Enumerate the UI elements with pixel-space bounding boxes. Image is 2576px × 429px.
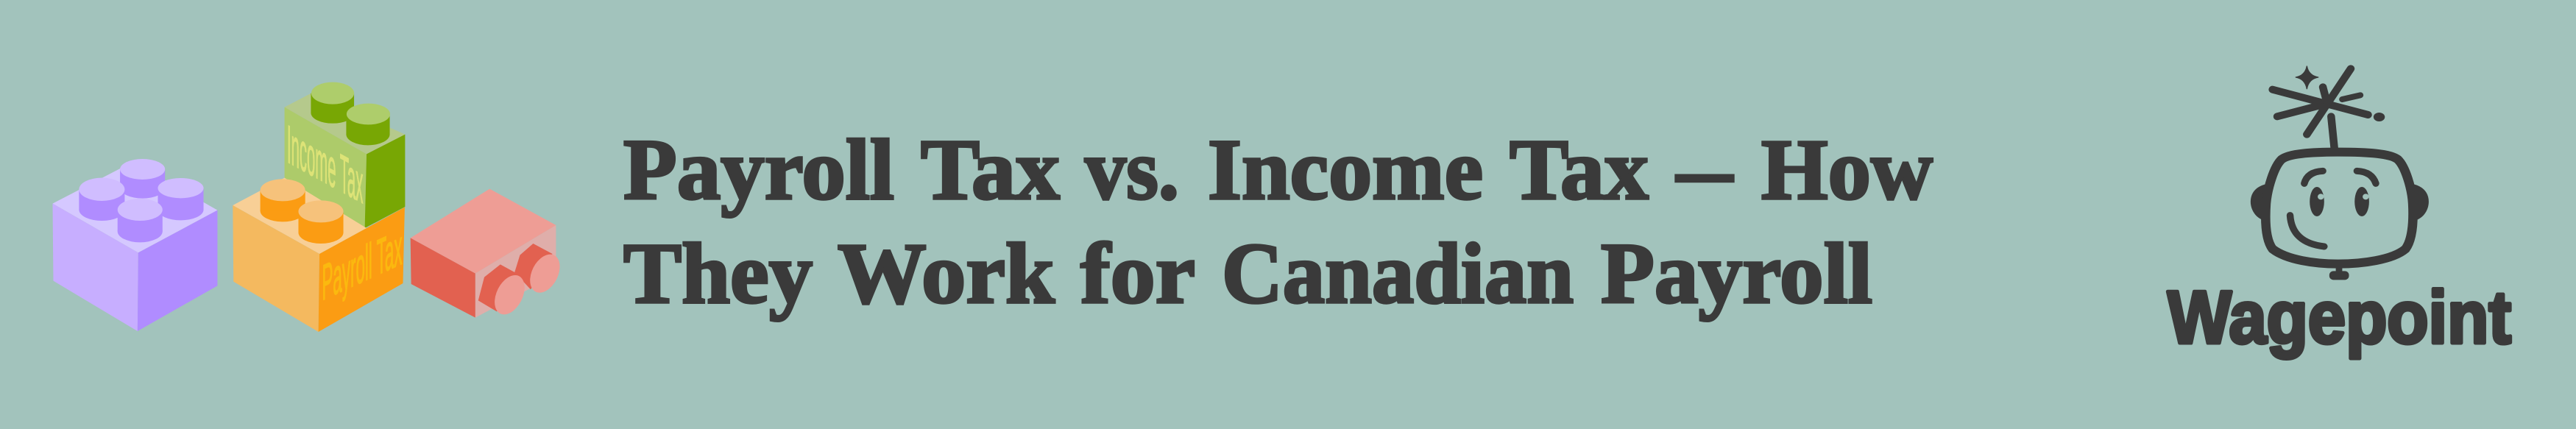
title line 1: vs. (1085, 121, 1179, 218)
title line 1: Payroll (623, 121, 894, 218)
title line 2: They (623, 225, 813, 322)
title line 1: How (1761, 121, 1933, 218)
icon: head outline (2265, 152, 2413, 264)
icon: sparkle (2273, 66, 2385, 149)
wordmark: Wagepoint (2168, 277, 2511, 359)
icon: purple block (53, 159, 217, 331)
label: Income Tax: Income Tax (287, 113, 363, 216)
title line 2: Work (838, 225, 1055, 322)
icon: robot mascot (2251, 66, 2429, 280)
title line 2 (623, 225, 1872, 322)
illustration: building blocks (53, 82, 565, 332)
icon: red block (411, 189, 565, 318)
icon: face (2290, 171, 2376, 247)
title line 1: Tax (1510, 121, 1649, 218)
title (623, 121, 1933, 322)
title line 2: for (1080, 225, 1195, 322)
title line 1: Tax (921, 121, 1060, 218)
title line 1: — (1675, 121, 1734, 218)
title line 2: Payroll (1601, 225, 1872, 322)
label: Payroll Tax: Payroll Tax (322, 219, 403, 311)
title line 1: Income (1208, 121, 1483, 218)
logo: Wagepoint (2168, 66, 2511, 359)
icon: orange payroll tax block (233, 178, 405, 332)
icon: ears (2251, 184, 2429, 280)
title line 1 (623, 121, 1933, 218)
icon: green income tax block (285, 82, 405, 228)
title line 2: Canadian (1222, 225, 1574, 322)
